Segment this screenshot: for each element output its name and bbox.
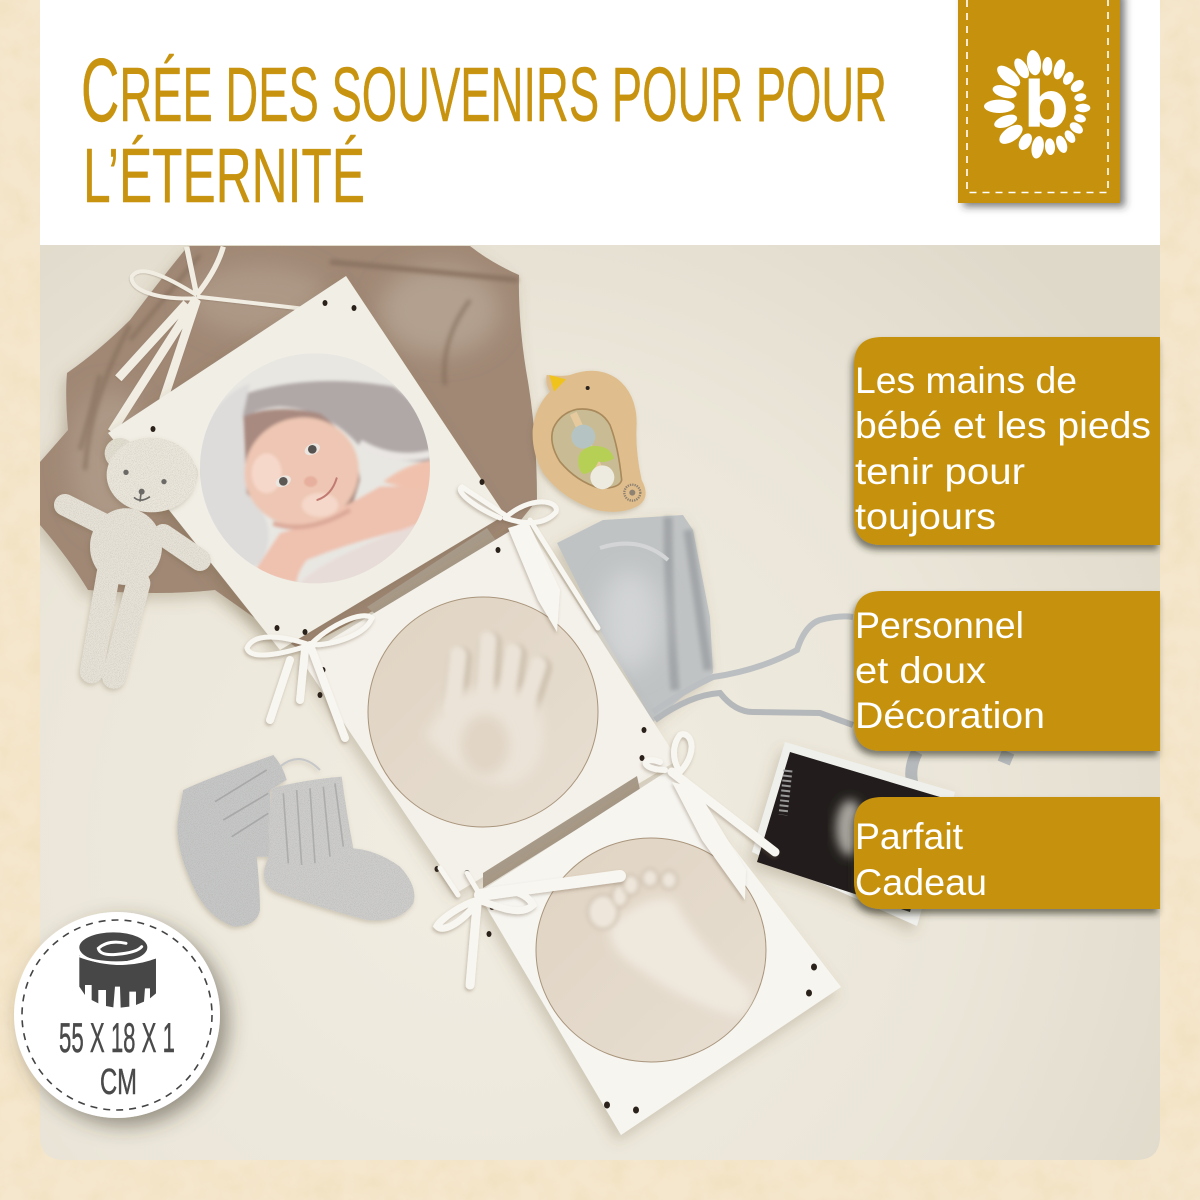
foot relief — [588, 869, 751, 1016]
panel 1 holes — [150, 300, 484, 635]
bow: panel 2 to 3 right — [646, 734, 775, 900]
ribbon bows between panels — [247, 487, 775, 985]
frame panel 3 with foot print — [478, 768, 841, 1135]
size badge — [14, 912, 220, 1118]
size badge: CM — [100, 1061, 137, 1102]
baby portrait — [197, 350, 433, 590]
icon: sunflower logo — [984, 49, 1090, 160]
gap between panel 2 and 3 — [483, 776, 640, 888]
bow: panel 1 to 2 right — [460, 487, 598, 632]
grey baby bonnet — [557, 515, 853, 725]
panel 2 holes — [318, 547, 646, 876]
label: baby hands and feet: toujours — [855, 496, 996, 537]
icon: sunflower logo: b — [1023, 68, 1069, 142]
ultrasound print — [752, 742, 955, 926]
ultrasound image — [757, 752, 940, 912]
title — [81, 41, 887, 219]
dimensions text: 55 X 18 X 1 — [59, 1014, 175, 1061]
label: perfect gift: Parfait — [855, 816, 964, 857]
label: personal decoration: Décoration — [855, 695, 1045, 736]
knitted booties — [177, 755, 414, 927]
label: baby hands and feet: tenir pour — [855, 451, 1025, 492]
label: perfect gift — [854, 797, 1160, 909]
clay disc: hand print — [368, 597, 598, 827]
header band — [40, 0, 1160, 246]
panel 3 holes — [486, 908, 817, 1114]
grey strap behind labels — [905, 751, 1014, 781]
wooden bird rattle — [533, 371, 646, 512]
label: perfect gift: Cadeau — [855, 862, 987, 903]
label: personal decoration: et doux — [855, 650, 987, 691]
gap between panel 1 and 2 — [367, 528, 497, 618]
bow: panel 1 to 2 left — [247, 616, 372, 738]
eyes and smile — [274, 441, 337, 500]
frame panel 2 with hand print — [300, 522, 678, 892]
label: baby hands and feet: bébé et les pieds — [855, 405, 1151, 446]
top ribbon bow — [112, 247, 300, 432]
panel 3 board — [478, 768, 841, 1135]
teddy bear — [65, 438, 200, 677]
panel 2 board — [300, 522, 678, 892]
label: personal decoration — [854, 591, 1160, 751]
logo tag — [958, 0, 1120, 203]
panel 1 board — [108, 276, 505, 650]
onesie — [40, 246, 537, 650]
icon: tape measure — [79, 932, 156, 1008]
label: baby hands and feet — [854, 337, 1160, 545]
wall backdrop — [40, 245, 1160, 1160]
clay disc: foot print — [536, 838, 766, 1062]
label: personal decoration: Personnel — [855, 605, 1024, 646]
title: L’ÉTERNITÉ — [83, 133, 365, 219]
hand relief — [425, 640, 544, 785]
frame panel 1 with photo — [108, 276, 505, 650]
label: baby hands and feet: Les mains de — [855, 360, 1077, 401]
bow: panel 2 to 3 left — [437, 868, 620, 985]
teddy face — [123, 470, 167, 502]
product photo — [40, 245, 1160, 1160]
